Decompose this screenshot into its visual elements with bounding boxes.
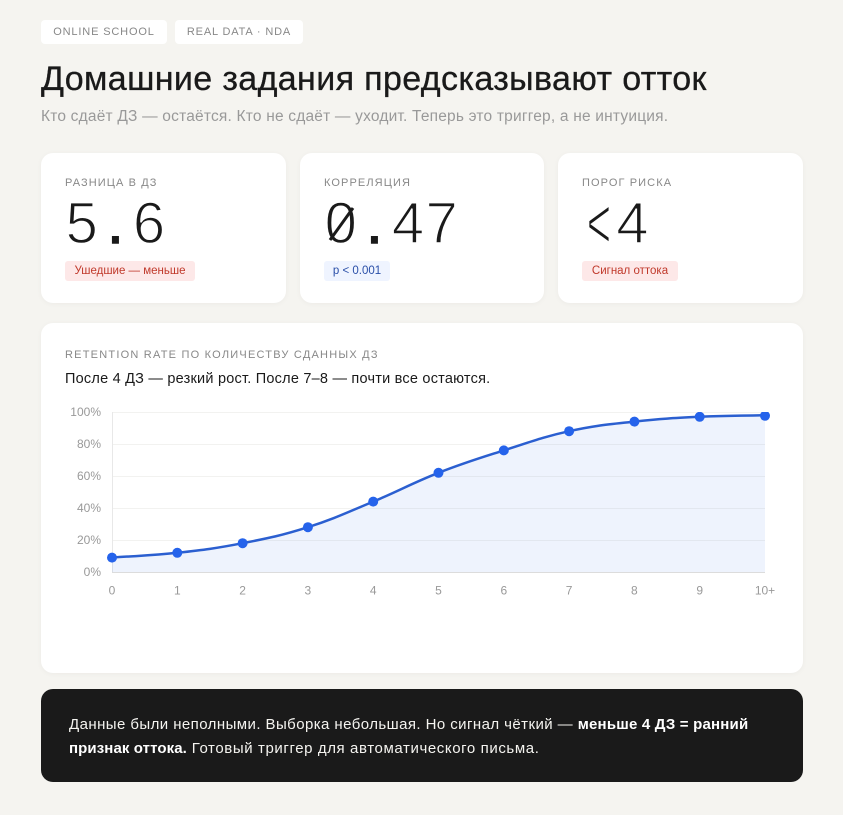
badge xyxy=(324,261,390,281)
x axis labels: 9 xyxy=(696,584,703,598)
y axis labels xyxy=(70,405,101,579)
callout text xyxy=(69,716,748,756)
x axis labels: 5 xyxy=(435,584,442,598)
line chart: retention by homework count xyxy=(71,408,775,594)
value: 7 xyxy=(425,191,458,256)
y axis labels: 100% xyxy=(70,405,101,419)
x axis labels: 6 xyxy=(500,584,507,598)
x axis labels: 7 xyxy=(566,584,573,598)
line and points xyxy=(107,411,770,563)
x axis line xyxy=(112,572,765,574)
value: < xyxy=(587,183,611,264)
badge: Сигнал оттока xyxy=(592,265,668,277)
panel: correlation xyxy=(300,153,544,303)
y axis labels: 40% xyxy=(77,501,101,515)
subtitle: Кто сдаёт ДЗ — остаётся. Кто не сдаёт — уходит. Теперь это триггер, а не интуиция. xyxy=(41,108,668,125)
label: КОРРЕЛЯЦИЯ xyxy=(324,177,411,189)
badge: Ушедшие — меньше xyxy=(74,265,186,277)
callout text: Данные были неполными. Выборка небольшая. Но сигнал чёткий — меньше 4 ДЗ = ранний xyxy=(69,716,748,732)
area fill xyxy=(112,415,765,572)
panel: retention chart xyxy=(41,323,803,673)
badge xyxy=(65,261,195,281)
value: . xyxy=(107,191,123,256)
value: 6 xyxy=(133,191,165,256)
panel: risk threshold xyxy=(558,153,803,303)
value: 5 xyxy=(66,191,98,256)
chart heading: RETENTION RATE ПО КОЛИЧЕСТВУ СДАННЫХ ДЗ xyxy=(65,349,379,361)
value: 0 xyxy=(325,191,357,256)
title: Домашние задания предсказывают отток xyxy=(41,60,707,98)
x axis labels: 4 xyxy=(370,584,377,598)
x axis labels: 0 xyxy=(109,584,116,598)
tag: real data NDA xyxy=(175,20,303,44)
x axis labels: 10+ xyxy=(755,584,775,598)
y axis labels: 0% xyxy=(84,565,101,579)
panel: difference in homework xyxy=(41,153,286,303)
y axis labels: 20% xyxy=(77,533,101,547)
y axis labels: 60% xyxy=(77,469,101,483)
x axis labels xyxy=(109,584,775,598)
value: 4 xyxy=(616,191,649,256)
zero slash xyxy=(328,207,354,241)
chart description: После 4 ДЗ — резкий рост. После 7–8 — почти все остаются. xyxy=(65,371,490,387)
badge xyxy=(582,261,678,281)
value xyxy=(587,183,649,264)
y axis labels: 80% xyxy=(77,437,101,451)
badge: p < 0.001 xyxy=(333,265,381,277)
value: . xyxy=(366,191,382,256)
callout text: признак оттока. Готовый триггер для автоматического письма. xyxy=(69,740,539,756)
x axis labels: 2 xyxy=(239,584,246,598)
label: ПОРОГ РИСКА xyxy=(582,177,672,189)
x axis labels: 1 xyxy=(174,584,181,598)
x axis labels: 3 xyxy=(305,584,312,598)
value xyxy=(66,191,165,256)
x axis labels: 8 xyxy=(631,584,638,598)
callout: conclusion xyxy=(41,689,803,782)
label: РАЗНИЦА В ДЗ xyxy=(65,177,158,189)
tag: real data NDA: REAL DATA · NDA xyxy=(187,26,291,38)
tag: online school xyxy=(41,20,167,44)
tag: online school: ONLINE SCHOOL xyxy=(53,26,155,38)
value: 4 xyxy=(392,191,424,256)
value xyxy=(325,191,458,256)
